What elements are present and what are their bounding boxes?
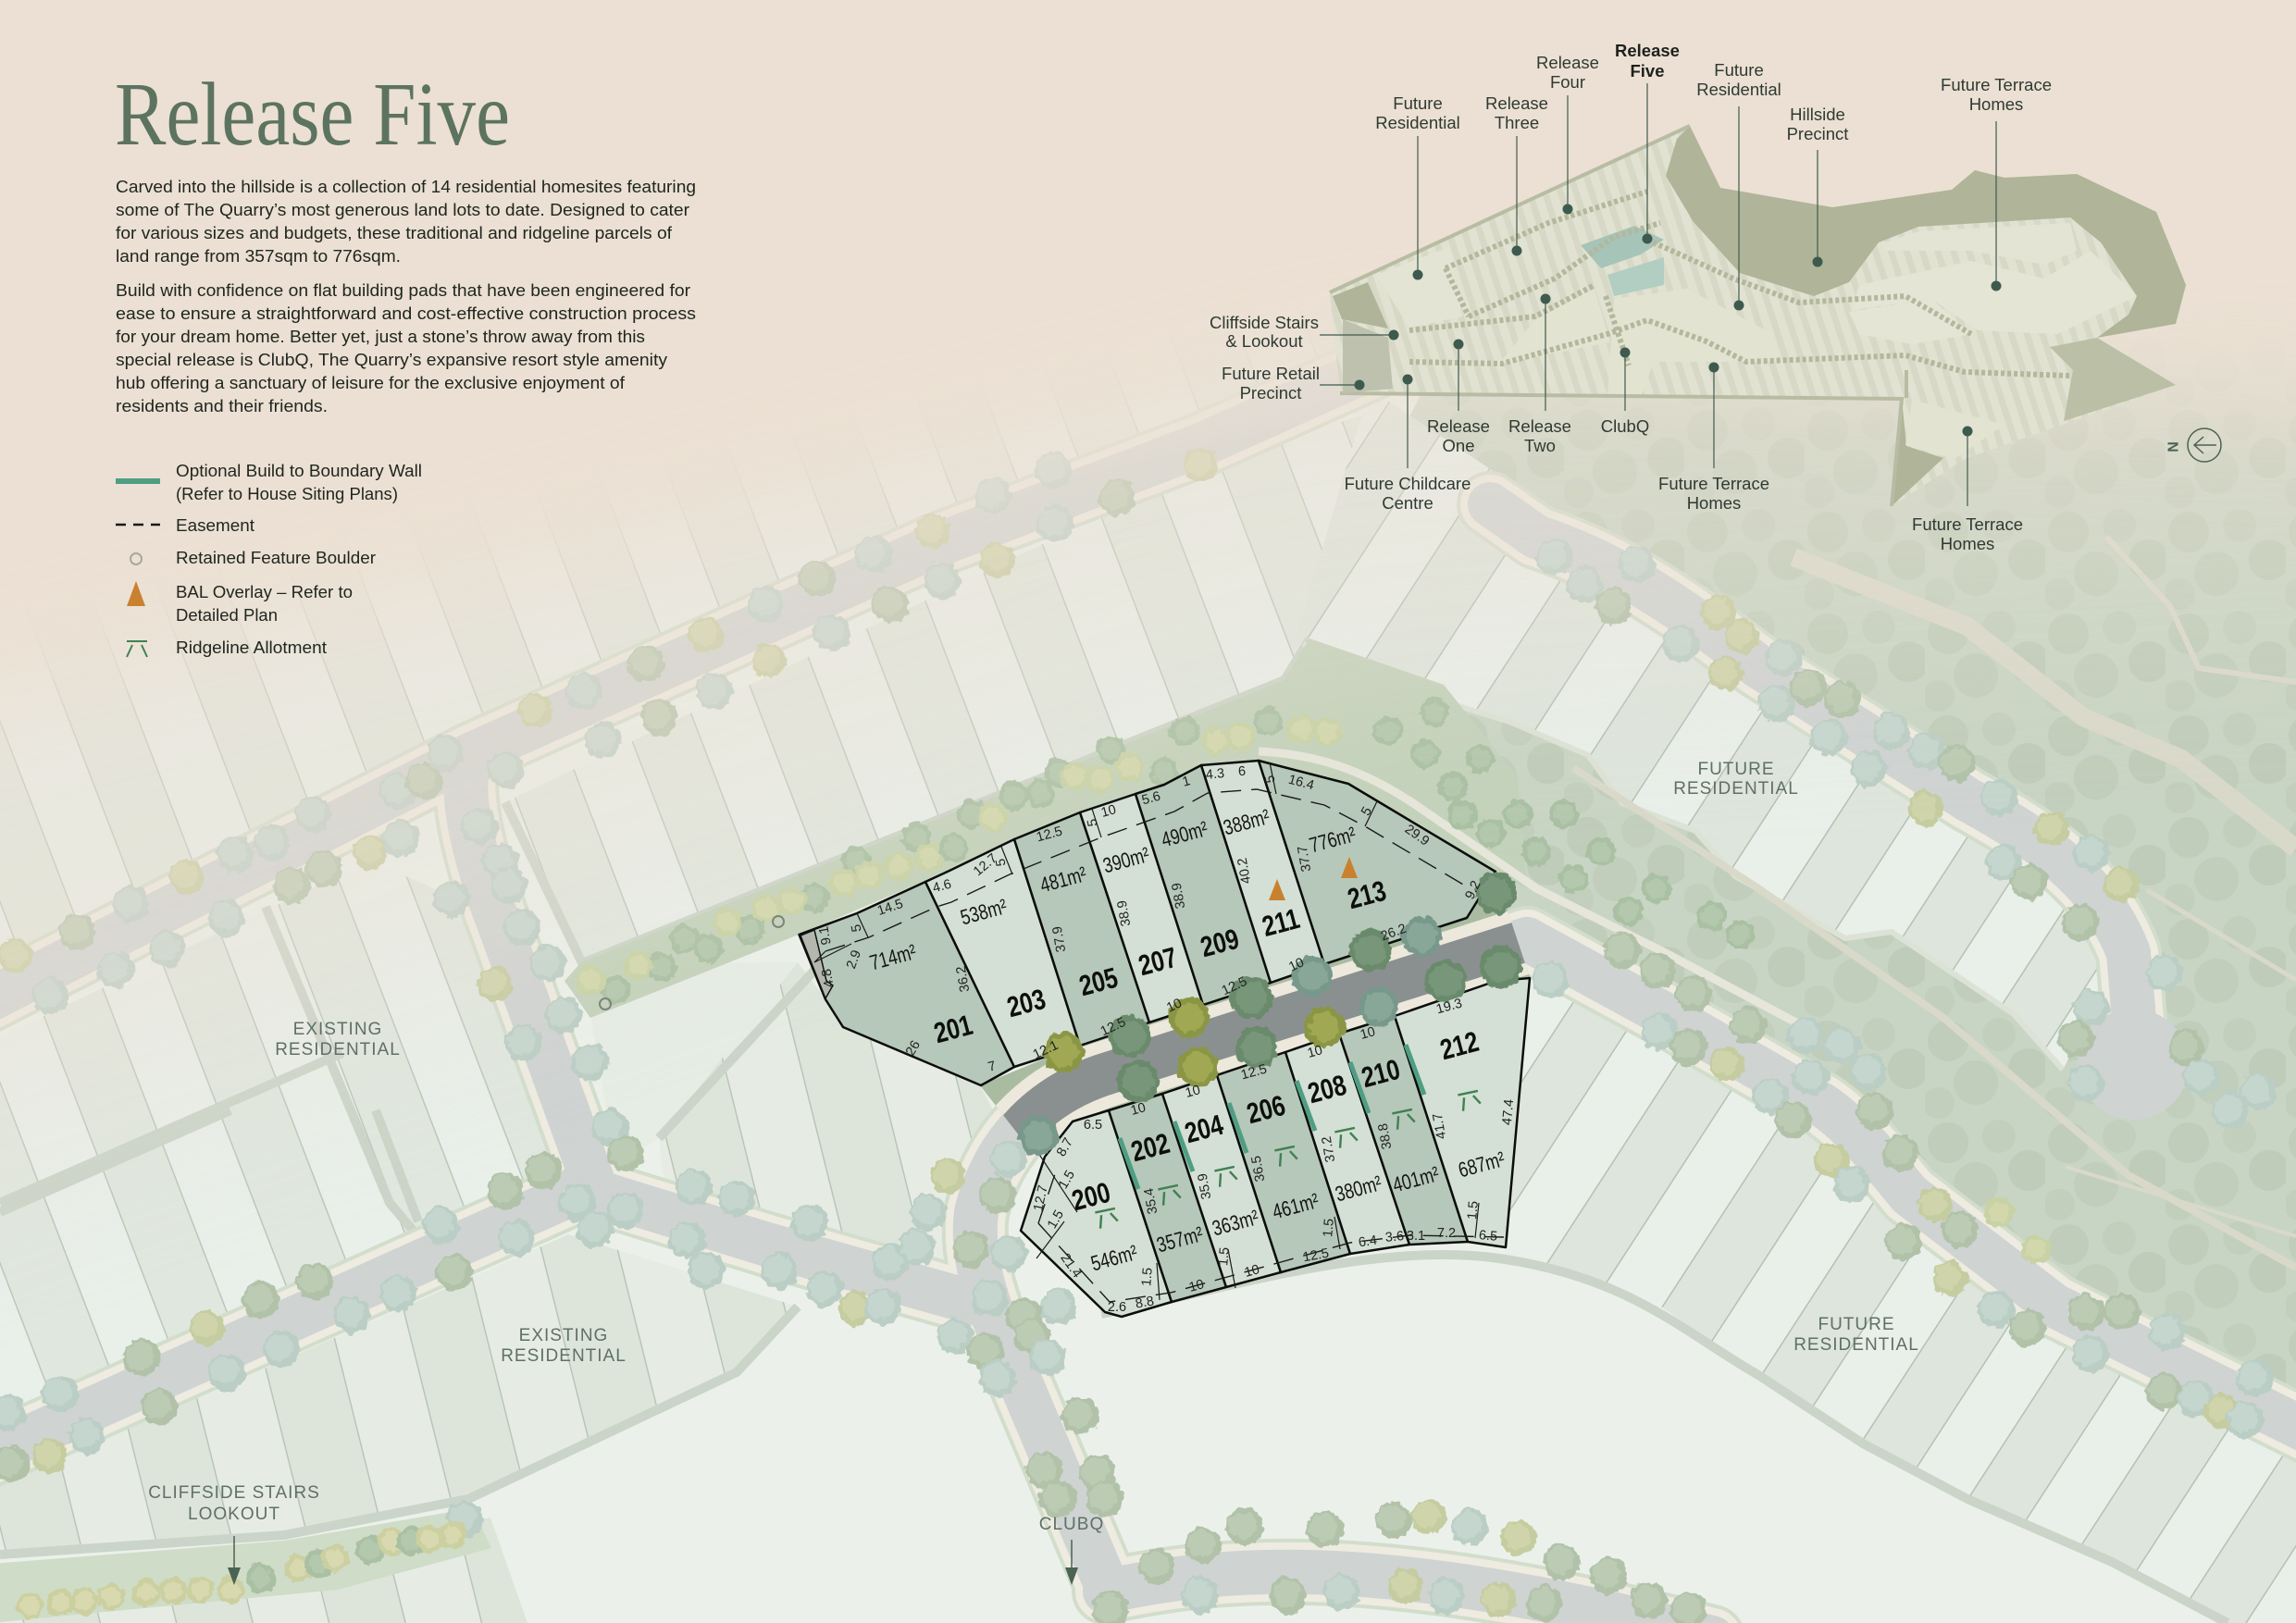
intro paragraph 1: for various sizes and budgets, these traditional and ridgeline parcels of <box>116 223 673 242</box>
key map labels: Cliffside Stairs <box>1210 313 1319 332</box>
legend: boundary wall: (Refer to House Siting Plans) <box>176 484 398 503</box>
easement lines <box>825 789 1504 1302</box>
lot dimensions: 16.4 <box>1286 773 1316 793</box>
key map labels: ClubQ <box>1601 416 1649 436</box>
lot dimensions: 6.5 <box>1478 1228 1498 1245</box>
map label: cliffside stairs lookout: CLIFFSIDE STAIRS <box>148 1483 320 1503</box>
lot 210 <box>1339 1016 1468 1245</box>
lot dimensions: 1.5 <box>1139 1267 1156 1287</box>
lot dimensions: 1.5 <box>1321 1218 1337 1238</box>
intro paragraph 2: ease to ensure a straightforward and cost-effective construction process <box>116 304 696 323</box>
intro paragraph 2: hub offering a sanctuary of leisure for the exclusive enjoyment of <box>116 373 626 392</box>
lot 212: 687m² <box>1456 1147 1508 1183</box>
lot 203 <box>925 839 1080 1067</box>
key map terrace lots <box>1882 223 2077 265</box>
lot dimensions: 35.4 <box>1142 1187 1160 1215</box>
lot dimensions: 37.7 <box>1296 845 1314 873</box>
lot 204: 363m² <box>1210 1206 1261 1241</box>
map label: existing residential west: RESIDENTIAL <box>275 1040 401 1059</box>
key map dots <box>1355 204 2001 437</box>
map label: existing residential west: EXISTING <box>293 1020 382 1039</box>
lot dimensions: 9.1 <box>816 925 835 946</box>
lot 204 <box>1162 1075 1281 1287</box>
key map labels: Future Childcare <box>1345 474 1471 493</box>
lot dimensions: 10 <box>1243 1262 1261 1281</box>
lot dimensions: 12.5 <box>1239 1062 1269 1083</box>
key map labels: Release <box>1485 93 1548 113</box>
lot dimensions: 10 <box>1286 955 1307 975</box>
lot 208: 380m² <box>1333 1171 1384 1207</box>
key map labels: One <box>1443 436 1474 455</box>
key map labels: Precinct <box>1787 124 1848 143</box>
lot dimensions: 6 <box>1237 764 1247 779</box>
feature boulders on map <box>600 916 784 1010</box>
lot dimensions: 7 <box>987 1059 998 1075</box>
key map leader lines <box>1320 83 1996 506</box>
lot dimensions: 29.9 <box>1402 822 1432 849</box>
key map labels: Homes <box>1941 534 1994 553</box>
release five road (highlighted) <box>981 902 1530 1157</box>
map label: existing residential south: EXISTING <box>519 1326 608 1345</box>
intro paragraph 2: Build with confidence on flat building pads that have been engineered for <box>116 280 690 300</box>
legend: BAL overlay: BAL Overlay – Refer to <box>176 582 353 601</box>
key map pale parcels <box>1607 289 1780 397</box>
ridgeline allotment markers <box>1095 1091 1482 1229</box>
intro paragraph 2: for your dream home. Better yet, just a stone’s throw away from this <box>116 327 645 346</box>
key map boundary lines <box>1330 126 1906 506</box>
lot dimensions: 26.2 <box>1379 922 1409 944</box>
key map base <box>1330 126 2186 506</box>
lot dimensions: 1.5 <box>1216 1246 1233 1267</box>
map label: future residential north: FUTURE <box>1697 760 1775 779</box>
lot 208: 208 <box>1305 1069 1349 1109</box>
lot dimensions: 47.4 <box>1500 1098 1517 1126</box>
lot 211 <box>1201 761 1324 983</box>
existing residential lots west <box>0 861 592 1443</box>
lot 208 <box>1285 1034 1409 1254</box>
lot 200: 200 <box>1069 1176 1113 1217</box>
lot 212 <box>1395 978 1530 1247</box>
lot dimensions: 9.2 <box>1462 878 1484 902</box>
lot dimensions: 26 <box>903 1038 924 1059</box>
lot 205 <box>1014 812 1149 1046</box>
key map labels: Future Terrace <box>1658 474 1769 493</box>
lot 201: 201 <box>931 1009 975 1049</box>
lot dimensions: 21.4 <box>1057 1251 1085 1281</box>
lot dimensions: 5 <box>1359 805 1375 818</box>
legend: ridgeline allotment: Ridgeline Allotment <box>176 638 327 657</box>
lot 211: 388m² <box>1221 805 1272 840</box>
key map labels: Hillside <box>1790 105 1845 124</box>
key map future retail area <box>1343 319 1393 393</box>
lot 209: 209 <box>1198 923 1242 963</box>
pale lots beside cross road <box>582 962 798 1166</box>
lot dimensions: 8.7 <box>1054 1135 1076 1159</box>
key map labels: Future Terrace <box>1941 75 2052 94</box>
intro paragraph 1: some of The Quarry’s most generous land lots to date. Designed to cater <box>116 200 689 219</box>
site key map <box>1210 41 2186 553</box>
lot dimensions: 10 <box>1359 1024 1377 1043</box>
key map labels: Residential <box>1375 113 1460 132</box>
lot dimensions: 36.5 <box>1249 1155 1268 1183</box>
legend: boundary wall <box>116 461 422 503</box>
release five highlight <box>1581 226 1664 268</box>
lot dimensions: 41.7 <box>1431 1112 1449 1140</box>
lot dimensions: 19.3 <box>1434 997 1464 1017</box>
lot dimensions: 4.8 <box>819 968 838 988</box>
legend: BAL overlay: Detailed Plan <box>176 605 278 625</box>
lot 206: 461m² <box>1270 1189 1322 1224</box>
lot 210: 401m² <box>1390 1162 1442 1197</box>
lot 207 <box>1080 794 1203 1022</box>
map label: existing residential south: RESIDENTIAL <box>501 1346 627 1366</box>
lot dimensions: 40.2 <box>1235 857 1254 885</box>
lot dimensions: 10 <box>1099 802 1118 821</box>
lot 205: 205 <box>1076 961 1121 1002</box>
map label: cliffside stairs lookout: LOOKOUT <box>188 1505 280 1524</box>
lot 209: 490m² <box>1159 817 1210 852</box>
lot 213 <box>1259 761 1496 964</box>
lot dimensions <box>816 764 1517 1315</box>
lot dimensions: 35.9 <box>1196 1172 1214 1200</box>
lot dimensions: 12.5 <box>1302 1246 1330 1265</box>
release five lots <box>800 761 1530 1317</box>
key map labels: Two <box>1524 436 1556 455</box>
lot dimensions: 1.5 <box>1045 1208 1067 1232</box>
key map labels: Centre <box>1382 493 1433 513</box>
lot dimensions: 38.8 <box>1376 1122 1395 1150</box>
lot 211: 211 <box>1259 902 1303 943</box>
legend: boundary wall: Optional Build to Boundary Wall <box>176 461 422 480</box>
lot dimensions: 1.5 <box>1465 1200 1482 1220</box>
map label: future residential south: FUTURE <box>1818 1315 1895 1334</box>
lots bottom left <box>0 1518 527 1623</box>
lot dimensions: 8.8 <box>1135 1294 1155 1312</box>
lot dimensions: 38.9 <box>1170 882 1188 910</box>
key map labels: Homes <box>1969 94 2023 114</box>
key map labels: Release <box>1508 416 1571 436</box>
key map labels: Release <box>1427 416 1490 436</box>
key map tree lines <box>1409 192 2070 376</box>
lot 206 <box>1217 1052 1350 1272</box>
lot dimensions: 5 <box>1262 774 1279 784</box>
map label: future residential north: RESIDENTIAL <box>1673 779 1799 799</box>
key map labels: Future Retail <box>1222 364 1320 383</box>
key map labels: Future <box>1393 93 1443 113</box>
key map labels <box>1210 41 2052 553</box>
legend <box>116 461 422 657</box>
lot dimensions: 10 <box>1164 996 1185 1016</box>
key map labels: Five <box>1630 61 1665 81</box>
dimension ticks <box>814 762 1479 1300</box>
map label: future residential south: RESIDENTIAL <box>1793 1335 1919 1355</box>
intro paragraph 2 <box>116 280 696 415</box>
lot dimensions: 6.4 <box>1358 1233 1378 1250</box>
arrow: clubq <box>1065 1540 1078 1585</box>
lot 205: 481m² <box>1037 862 1089 898</box>
key map labels: Four <box>1550 72 1585 92</box>
cream walking path <box>1259 751 1805 1027</box>
lot 203: 203 <box>1004 983 1049 1023</box>
lot dimensions: 12.1 <box>1031 1038 1061 1062</box>
intro paragraph 1: land range from 357sqm to 776sqm. <box>116 246 401 266</box>
key map labels: Three <box>1495 113 1539 132</box>
lot dimensions: 7.2 <box>1437 1226 1456 1241</box>
intro paragraph 1 <box>116 177 696 266</box>
key map labels: Future <box>1714 60 1764 80</box>
lot dimensions: 5 <box>993 858 1010 867</box>
lot dimensions: 10 <box>1184 1083 1202 1101</box>
lot 204: 204 <box>1182 1109 1227 1149</box>
lot dimensions: 1 <box>1181 774 1192 790</box>
lot dimensions: 12.7 <box>1031 1184 1051 1212</box>
lot dimensions: 36.2 <box>954 965 973 993</box>
lot dimensions: 10 <box>1129 1100 1148 1119</box>
key map labels: Release <box>1615 41 1680 60</box>
lots south of main road <box>505 407 1388 963</box>
lot 200 <box>1021 1110 1172 1317</box>
lot dimensions: 3.6 <box>1384 1229 1405 1245</box>
intro paragraph 2: special release is ClubQ, The Quarry’s expansive resort style amenity <box>116 350 668 369</box>
beige fade over top of map <box>0 0 2296 1240</box>
lot 213: 776m² <box>1307 823 1359 858</box>
lot 201: 714m² <box>867 940 919 975</box>
lot dimensions: 6.5 <box>1084 1118 1102 1133</box>
lot dimensions: 12.7 <box>971 851 1000 879</box>
lot dimensions: 4.6 <box>931 877 953 896</box>
lot dimensions: 12.5 <box>1035 824 1064 845</box>
intro paragraph 2: residents and their friends. <box>116 396 328 415</box>
key map labels: Homes <box>1687 493 1741 513</box>
key map labels: Release <box>1536 53 1599 72</box>
future residential lots upper <box>1296 389 2105 1070</box>
bottom landscape strip <box>0 1508 491 1623</box>
stone edge strips <box>0 639 2228 1623</box>
lot 203: 538m² <box>958 895 1010 930</box>
legend: BAL overlay <box>127 581 353 625</box>
lot 202: 202 <box>1128 1127 1173 1168</box>
lot 212: 212 <box>1437 1025 1482 1066</box>
lot 209 <box>1136 765 1271 1005</box>
lots north of main road <box>0 93 1573 995</box>
lot dimensions: 10 <box>1187 1277 1206 1295</box>
lot dimensions: 10 <box>1306 1043 1324 1061</box>
lot dimensions: 4.3 <box>1205 766 1225 783</box>
lot dimensions: 1.5 <box>1056 1168 1078 1192</box>
hillside landscape <box>1296 278 2296 1443</box>
street trees <box>0 448 2277 1623</box>
road network <box>0 361 2296 1623</box>
lot 201 <box>800 882 1014 1085</box>
lot dimensions: 14.5 <box>875 897 905 919</box>
lot 206: 206 <box>1244 1089 1288 1130</box>
lot dimensions: 38.9 <box>1115 899 1134 927</box>
lot 202: 357m² <box>1154 1222 1206 1258</box>
landscape strip above lots <box>565 638 1527 1018</box>
arrow: cliffside stairs <box>228 1536 241 1585</box>
title: Release Five <box>115 65 510 165</box>
map label: clubq: CLUBQ <box>1039 1515 1104 1534</box>
lot 210: 210 <box>1359 1053 1403 1094</box>
north arrow <box>2166 428 2221 462</box>
trees along release five road <box>1018 872 1522 1156</box>
future residential lots lower <box>1504 972 2296 1623</box>
legend: boulder: Retained Feature Boulder <box>176 548 376 567</box>
lot 207: 390m² <box>1100 843 1152 878</box>
key map labels: Future Terrace <box>1912 514 2023 534</box>
lot 202 <box>1109 1094 1226 1302</box>
lot dimensions: 3.1 <box>1407 1229 1425 1244</box>
key map hillside <box>1666 126 2186 338</box>
key map labels: Precinct <box>1240 383 1301 403</box>
intro paragraph 1: Carved into the hillside is a collection of 14 residential homesites featuring <box>116 177 696 196</box>
lot dimensions: 2.6 <box>1108 1300 1126 1315</box>
lot dimensions: 5 <box>1085 818 1101 827</box>
lots above road D <box>659 962 1018 1277</box>
key map labels: Residential <box>1696 80 1781 99</box>
lot dimensions: 37.9 <box>1050 925 1069 953</box>
lot dimensions: 12.5 <box>1098 1015 1128 1039</box>
lot dimensions: 2.9 <box>844 948 864 971</box>
lot 213: 213 <box>1345 874 1389 915</box>
lot dimensions: 5 <box>849 923 865 933</box>
lot dimensions: 12.5 <box>1220 974 1249 998</box>
lot dimensions: 5.6 <box>1140 789 1162 808</box>
lot 200: 546m² <box>1088 1241 1140 1276</box>
lot 207: 207 <box>1136 941 1180 982</box>
existing residential lots south <box>0 1234 798 1555</box>
key map labels: & Lookout <box>1225 331 1303 351</box>
legend: easement: Easement <box>176 515 254 535</box>
north arrow: N <box>2166 441 2182 452</box>
key map lower hillside <box>2050 338 2176 421</box>
lot dimensions: 37.2 <box>1320 1135 1338 1163</box>
hillside paths <box>1573 537 2296 1268</box>
